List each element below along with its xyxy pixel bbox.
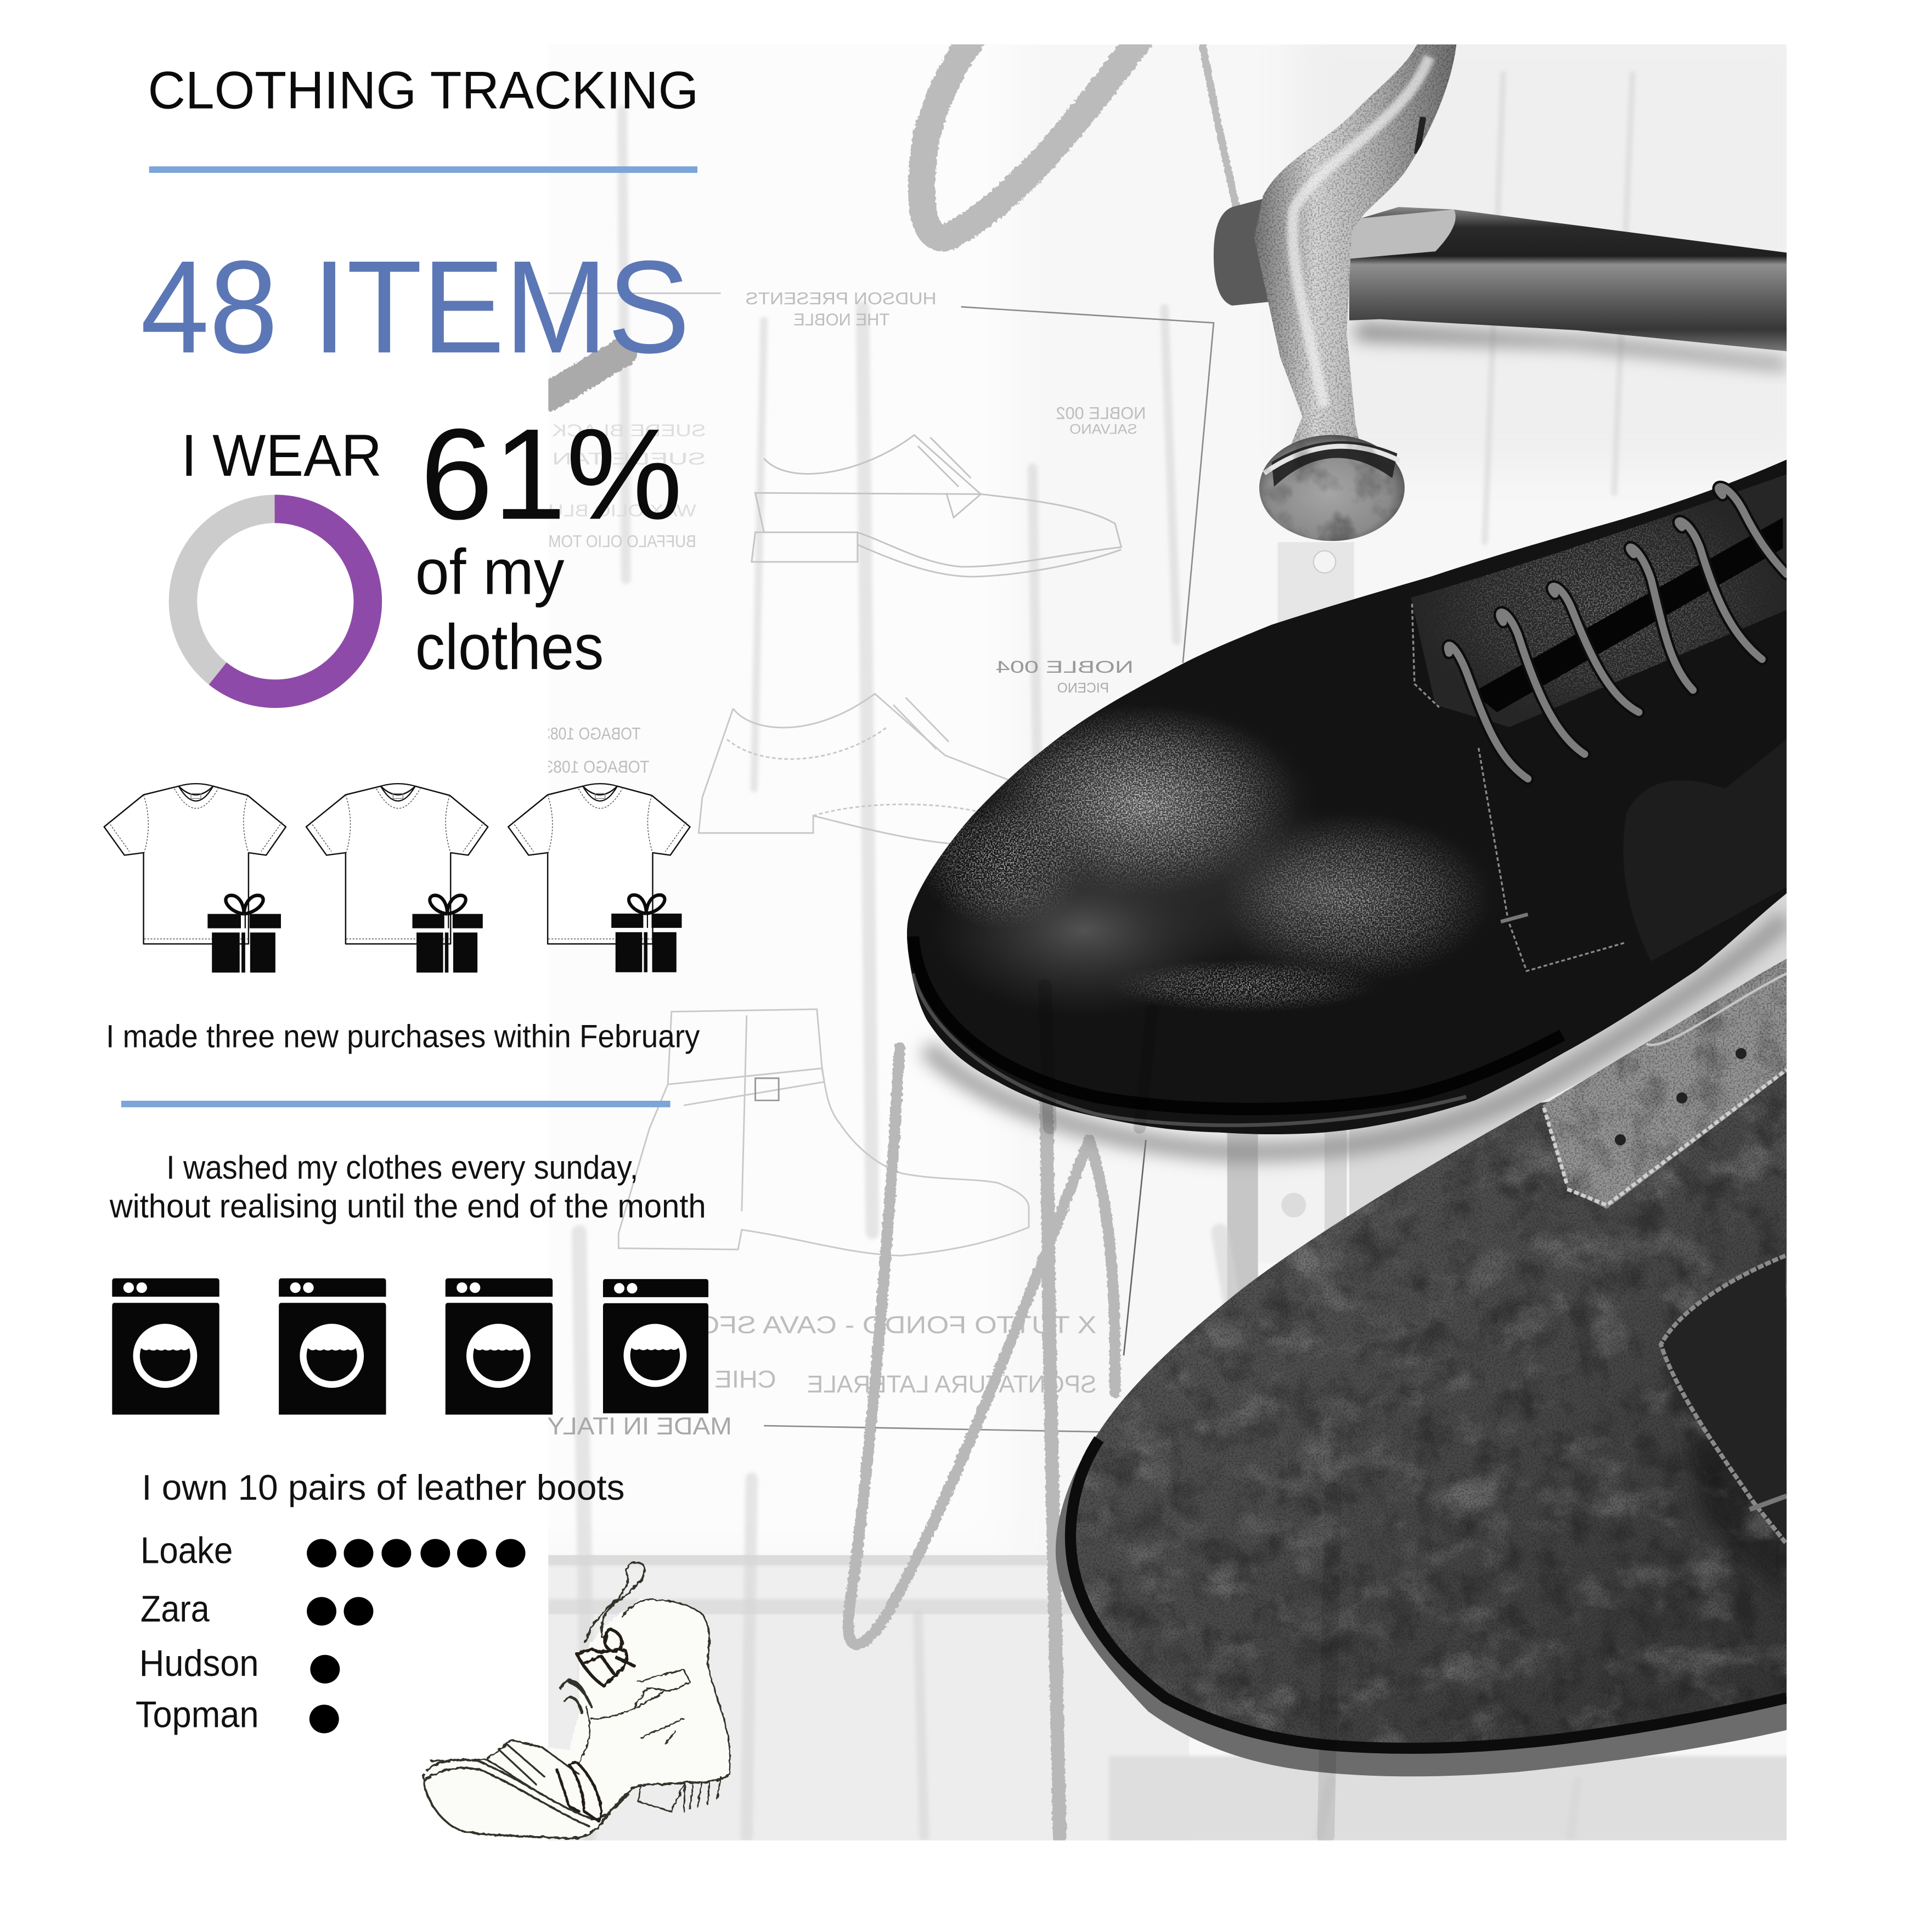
mirrored sheet lettering: MADE IN ITALY bbox=[547, 1412, 732, 1440]
boots heading: I own 10 pairs of leather boots bbox=[142, 1467, 624, 1507]
hammer striker bbox=[1214, 197, 1269, 306]
mirrored sheet lettering: X TUTTO FONDO - CAVA SFONDATA bbox=[604, 1311, 1097, 1339]
mirrored sheet lettering: TOBAGO 1083 bbox=[542, 724, 641, 743]
t-shirt icon 1 bbox=[104, 784, 286, 944]
flap stitching bbox=[1544, 1070, 1787, 1205]
sole edge bbox=[1056, 1072, 1787, 1776]
mirrored sheet lettering: NOBLE 004 bbox=[995, 657, 1134, 677]
mirrored sheet lettering: SPONTATURA LATERALE bbox=[807, 1370, 1097, 1398]
donut chart: 61% worn bbox=[183, 509, 368, 694]
paper background bbox=[493, 0, 1811, 1842]
headline: 48 items: 48 ITEMS bbox=[140, 233, 690, 380]
mirrored sheet lettering bbox=[542, 289, 1146, 1440]
hammer bbox=[1214, 44, 1787, 541]
soft toe glow bbox=[930, 844, 1238, 1017]
speckled highlight: toe crown bbox=[979, 705, 1300, 897]
stat label: I wear: I WEAR bbox=[181, 422, 382, 488]
title divider bbox=[149, 166, 697, 173]
pencil overlay on shoes bbox=[1045, 986, 1333, 1836]
quarter panel bbox=[579, 1670, 690, 1762]
sole bbox=[424, 1775, 729, 1838]
sketch: oxford shoe bbox=[752, 435, 1121, 577]
boots row: Topman bbox=[136, 1695, 339, 1736]
hammer head texture bbox=[1244, 44, 1466, 488]
heel counter bbox=[622, 1600, 730, 1775]
washing caption bbox=[109, 1149, 706, 1225]
washing machine icon 1 bbox=[112, 1279, 219, 1415]
speckled highlight: lower toe bbox=[1109, 959, 1380, 1013]
t-shirt icon 3 bbox=[508, 784, 690, 944]
mirrored sheet lettering: NOBLE 002 bbox=[1056, 403, 1146, 423]
tongue bbox=[585, 1562, 645, 1642]
hammer handle bbox=[1349, 207, 1787, 351]
seam tab bbox=[1501, 914, 1528, 922]
sketch: buckle boot bbox=[618, 1009, 1029, 1256]
purchases caption: I made three new purchases within February bbox=[106, 1019, 700, 1055]
mirrored sheet lettering: SUEDE TAN bbox=[552, 449, 706, 469]
shoe 2: grey suede oxford bbox=[1047, 959, 1787, 1776]
sole welt bbox=[913, 937, 1562, 1109]
lace knots bbox=[577, 1629, 634, 1686]
washing caption: I washed my clothes every sunday, bbox=[166, 1149, 638, 1186]
technical sheet lines bbox=[548, 293, 1214, 1432]
heel ridges bbox=[638, 1777, 721, 1811]
boots row: Hudson bbox=[139, 1643, 340, 1684]
lace pocket bbox=[1661, 1256, 1787, 1544]
hammer head bbox=[1254, 44, 1456, 481]
speckled highlight: toe side bbox=[918, 795, 1090, 930]
mirrored sheet lettering: TOBAGO 1083 bbox=[545, 757, 649, 776]
boot silhouette fill bbox=[424, 1598, 730, 1838]
welt lines bbox=[425, 1760, 628, 1826]
eyelet strip bbox=[557, 1762, 601, 1821]
suede base bbox=[1047, 1072, 1787, 1775]
pen sketch: worn boot bbox=[424, 1562, 730, 1838]
mirrored sheet lettering: SALVANO bbox=[1069, 422, 1137, 437]
boots row: Topman: Topman bbox=[136, 1695, 259, 1736]
flap top seam bbox=[1646, 973, 1787, 1045]
faint vertical stripes bbox=[579, 74, 1632, 1836]
suede grain bbox=[1047, 1072, 1787, 1775]
small peg below hammer bbox=[1314, 551, 1336, 573]
mirrored sheet lettering: HUDSON PRESENTS bbox=[746, 289, 937, 308]
boots row: Hudson: Hudson bbox=[139, 1643, 259, 1684]
mirrored sheet lettering: PICENO bbox=[1057, 681, 1109, 696]
boots row: Loake bbox=[140, 1530, 525, 1571]
title: CLOTHING TRACKING bbox=[148, 61, 699, 120]
washing machine icon 4 bbox=[603, 1279, 708, 1414]
hammer wood tip bbox=[1349, 210, 1456, 259]
pencil scribble top bbox=[548, 37, 1242, 397]
shoe 2 tongue flap bbox=[1542, 959, 1787, 1209]
centre bands bbox=[1227, 1128, 1258, 1306]
mirrored sheet lettering: WAX OLIO BLU bbox=[548, 501, 696, 520]
suede dark patches bbox=[1047, 1072, 1787, 1775]
stat caption: clothes bbox=[415, 611, 604, 683]
gift icon 1 bbox=[207, 896, 281, 972]
hammer shadow bbox=[1355, 323, 1787, 370]
pocket tab bbox=[1750, 1496, 1787, 1510]
speckled highlight: toe centre bbox=[1220, 813, 1491, 986]
washing machine icon 3 bbox=[446, 1279, 553, 1415]
soft crown glow bbox=[973, 702, 1319, 912]
shoe 1: dark suede oxford bbox=[907, 460, 1787, 1134]
sketch: brogue shoe bbox=[699, 694, 1015, 845]
section divider bbox=[121, 1101, 671, 1107]
t-shirt icon 2 bbox=[306, 784, 488, 944]
boots row: Zara bbox=[140, 1589, 373, 1630]
mirrored sheet lettering: SUEDE BLACK bbox=[552, 421, 706, 440]
flap eyelets bbox=[1615, 1048, 1747, 1145]
mirrored sheet lettering: THE NOBLE bbox=[793, 310, 889, 329]
washing machine icon 2 bbox=[279, 1279, 386, 1415]
stat value: 61%: 61% bbox=[420, 402, 683, 546]
shoe 1 shadow bbox=[927, 918, 1787, 1152]
pencil scribble bottom bbox=[848, 986, 1115, 1837]
mirrored sheet lettering: CHIE bbox=[714, 1365, 776, 1393]
lower panel bbox=[1623, 739, 1787, 961]
lace loops bbox=[561, 1681, 592, 1713]
suede light clouds bbox=[1047, 1072, 1787, 1775]
toe cap bbox=[431, 1740, 579, 1787]
sole band bbox=[1071, 1439, 1787, 1748]
washing caption: without realising until the end of the month bbox=[109, 1187, 706, 1225]
stat caption: of my bbox=[415, 536, 565, 607]
hammer cap bbox=[1259, 435, 1405, 541]
gift icon 3 bbox=[611, 895, 681, 972]
lace slit bbox=[1472, 517, 1783, 712]
boots row: Zara: Zara bbox=[140, 1589, 210, 1630]
stat caption bbox=[415, 536, 604, 683]
mirrored sheet lettering: BUFFALO OLIO TOM bbox=[548, 532, 696, 551]
strip under hammer bbox=[1278, 542, 1354, 628]
laces bbox=[1447, 487, 1787, 779]
stitching bbox=[1412, 604, 1625, 971]
dark upper region bbox=[1590, 1084, 1787, 1602]
soft centre glow bbox=[1134, 807, 1503, 980]
boots row: Loake: Loake bbox=[140, 1530, 233, 1571]
upper panel bbox=[1411, 475, 1787, 727]
photo: workbench with hammer and suede shoes bbox=[493, 0, 1811, 1842]
gift icon 2 bbox=[413, 896, 483, 972]
